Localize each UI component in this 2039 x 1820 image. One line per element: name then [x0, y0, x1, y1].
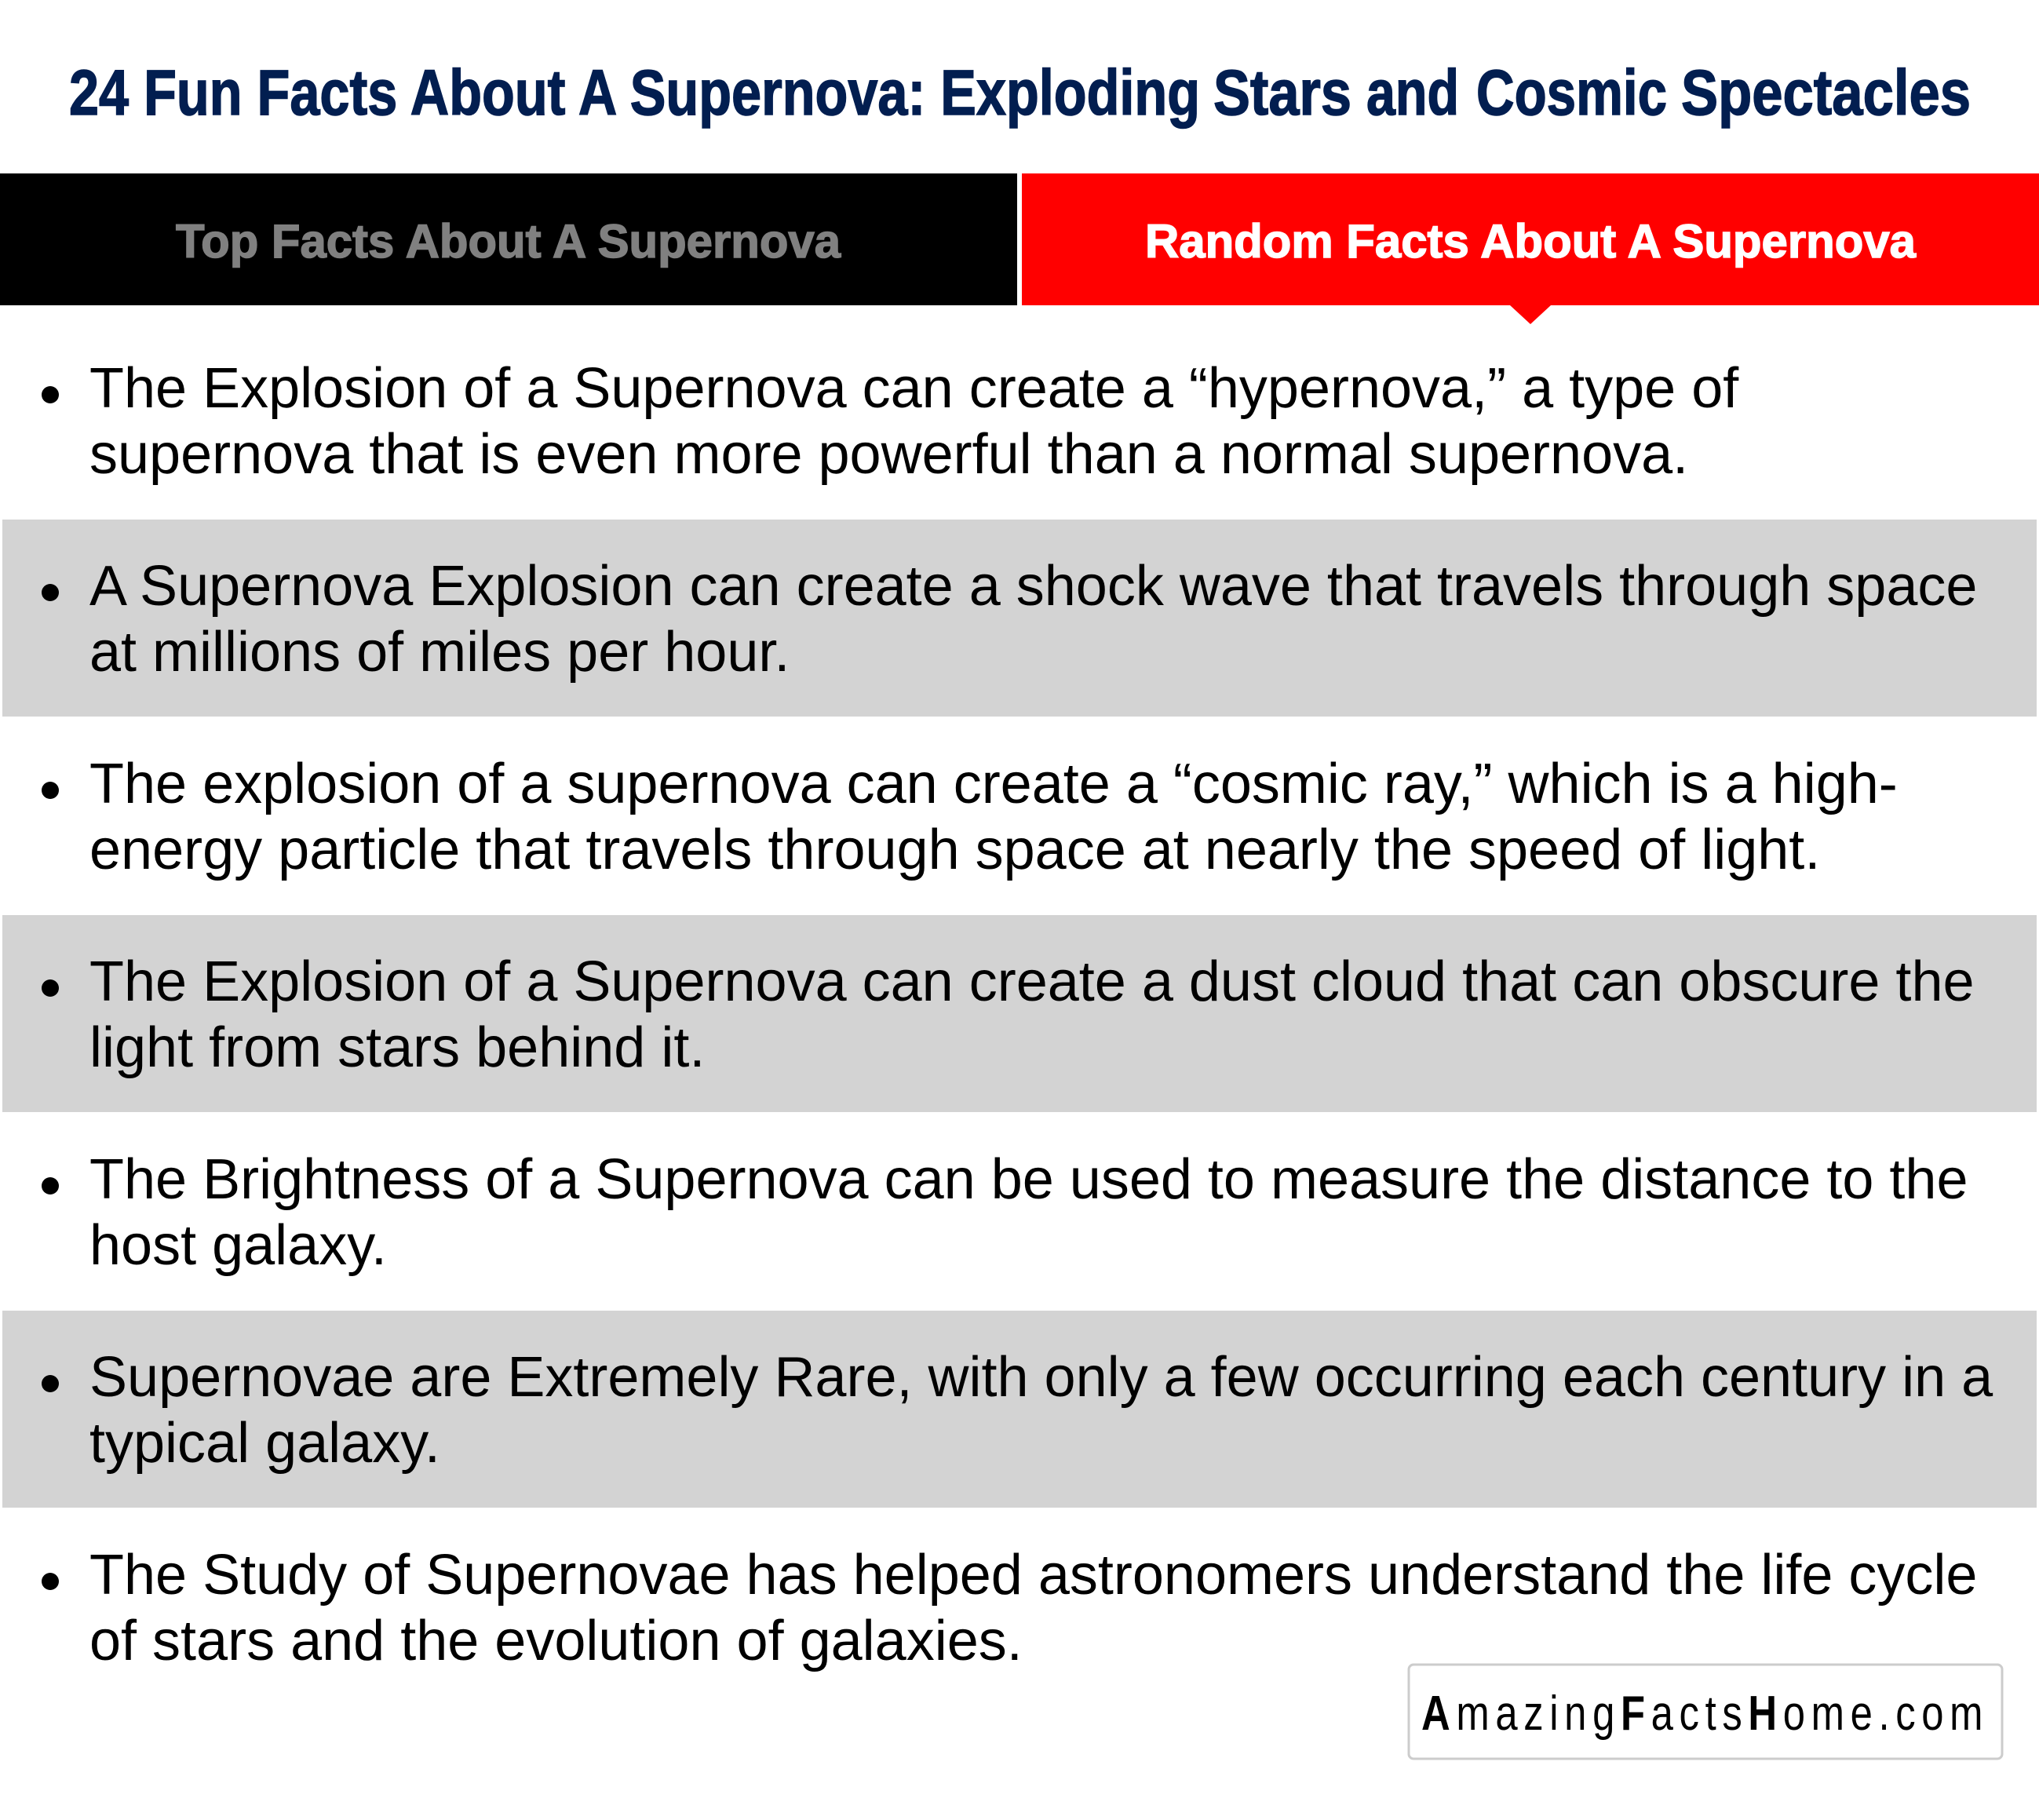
- title: Spectacles: [1681, 57, 1971, 129]
- fact 4: [2, 915, 2037, 1112]
- fact 7: of stars and the evolution of galaxies.: [89, 1610, 1023, 1672]
- fact 3: [42, 753, 1898, 881]
- tab: random facts: Random Facts About A Supernova: [1145, 215, 1917, 268]
- fact 1: supernova that is even more powerful than a normal supernova.: [89, 423, 1688, 486]
- fact 6: typical galaxy.: [89, 1412, 440, 1475]
- tab: top facts: Top Facts About A Supernova: [176, 215, 841, 268]
- fact 1: [42, 357, 1739, 486]
- tab: top facts: [0, 173, 1017, 305]
- fact 7: The Study of Supernovae has helped astronomers understand the life cycle: [89, 1544, 1977, 1607]
- fact 4: The Explosion of a Supernova can create a dust cloud that can obscure the: [89, 950, 1975, 1013]
- fact 6: [2, 1311, 2037, 1508]
- fact 7: [42, 1544, 1977, 1672]
- fact 5: host galaxy.: [89, 1214, 387, 1277]
- title: and: [1366, 57, 1459, 129]
- logo: AmazingFactsHome.com: AmazingFactsHome.com: [1421, 1687, 1989, 1741]
- fact 2: A Supernova Explosion can create a shock wave that travels through space: [89, 555, 1977, 618]
- fact 2: [2, 520, 2037, 717]
- fact 4: light from stars behind it.: [89, 1016, 705, 1079]
- fact 6: Supernovae are Extremely Rare, with only a few occurring each century in a: [89, 1346, 1993, 1409]
- fact 3: The explosion of a supernova can create a “cosmic ray,” which is a high-: [89, 753, 1898, 815]
- fact 1: The Explosion of a Supernova can create a “hypernova,” a type of: [89, 357, 1739, 420]
- logo: AmazingFactsHome.com: [1409, 1665, 2002, 1759]
- fact 2: at millions of miles per hour.: [89, 621, 790, 684]
- title: Stars: [1213, 57, 1351, 129]
- title: 24 Fun Facts About A Supernova: Exploding: [69, 57, 1200, 129]
- tab: random facts: [1022, 173, 2039, 324]
- title: Cosmic: [1476, 57, 1667, 129]
- fact 3: energy particle that travels through space at nearly the speed of light.: [89, 819, 1820, 881]
- fact 5: [42, 1148, 1968, 1277]
- fact 5: The Brightness of a Supernova can be used to measure the distance to the: [89, 1148, 1968, 1211]
